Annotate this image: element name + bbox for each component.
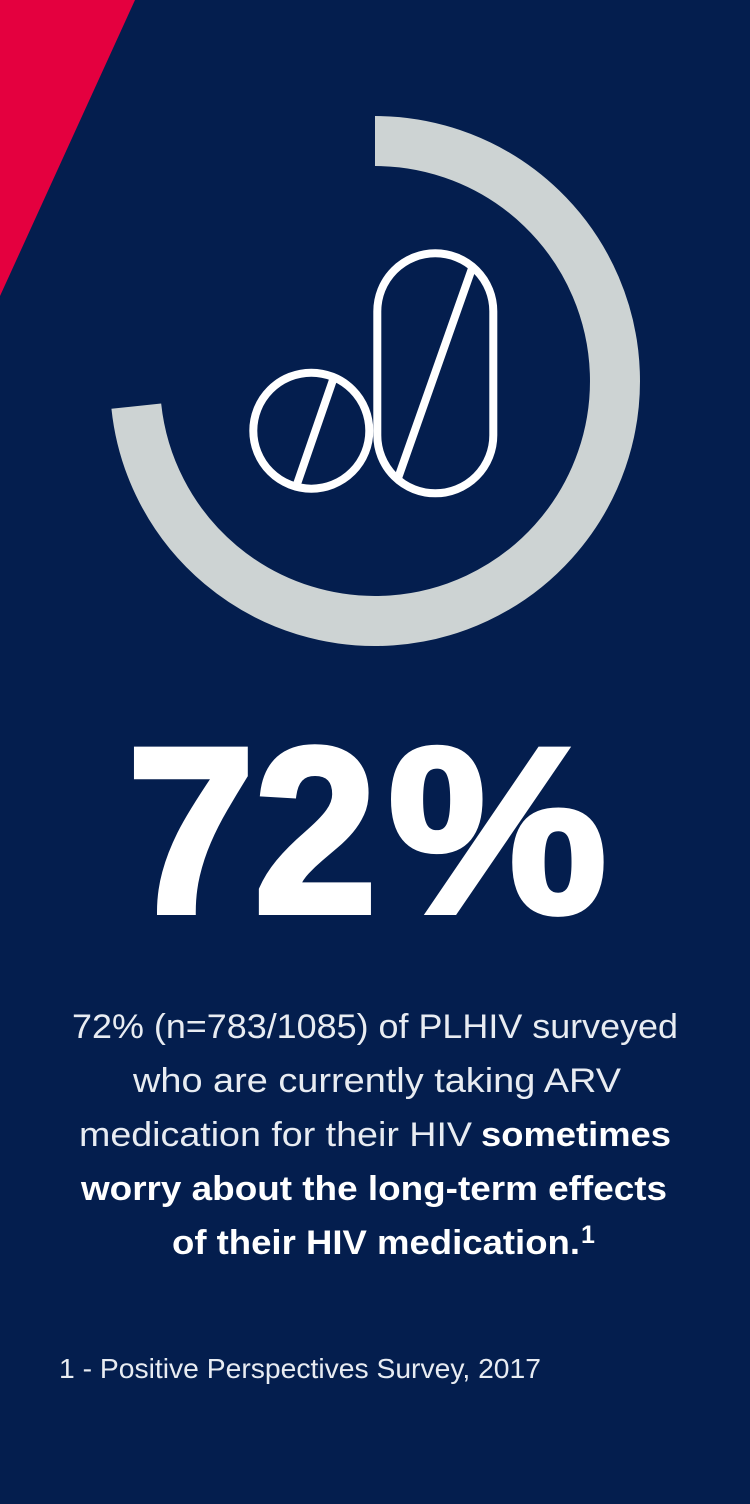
big statistic xyxy=(127,699,607,963)
icon: round tablet xyxy=(253,373,369,489)
description text: 1 xyxy=(581,1221,595,1249)
icon: pills xyxy=(253,253,493,493)
big statistic: 7 xyxy=(127,699,255,963)
footnote: 1 - Positive Perspectives Survey, 2017 xyxy=(59,1353,541,1384)
description text xyxy=(72,1008,678,1262)
description text: who are currently taking ARV xyxy=(132,1062,621,1100)
big statistic: % xyxy=(388,699,607,963)
description text: sometimes xyxy=(481,1116,671,1154)
progress ring: 72 percent xyxy=(136,141,615,621)
description text: medication for their HIV xyxy=(79,1116,472,1154)
description text: worry about the long-term effects xyxy=(80,1170,667,1208)
big statistic: 2 xyxy=(254,699,377,963)
red corner triangle xyxy=(0,0,135,296)
description text: of their HIV medication. xyxy=(172,1224,580,1262)
icon: capsule xyxy=(377,253,493,493)
description text: 72% (n=783/1085) of PLHIV surveyed xyxy=(72,1008,678,1046)
